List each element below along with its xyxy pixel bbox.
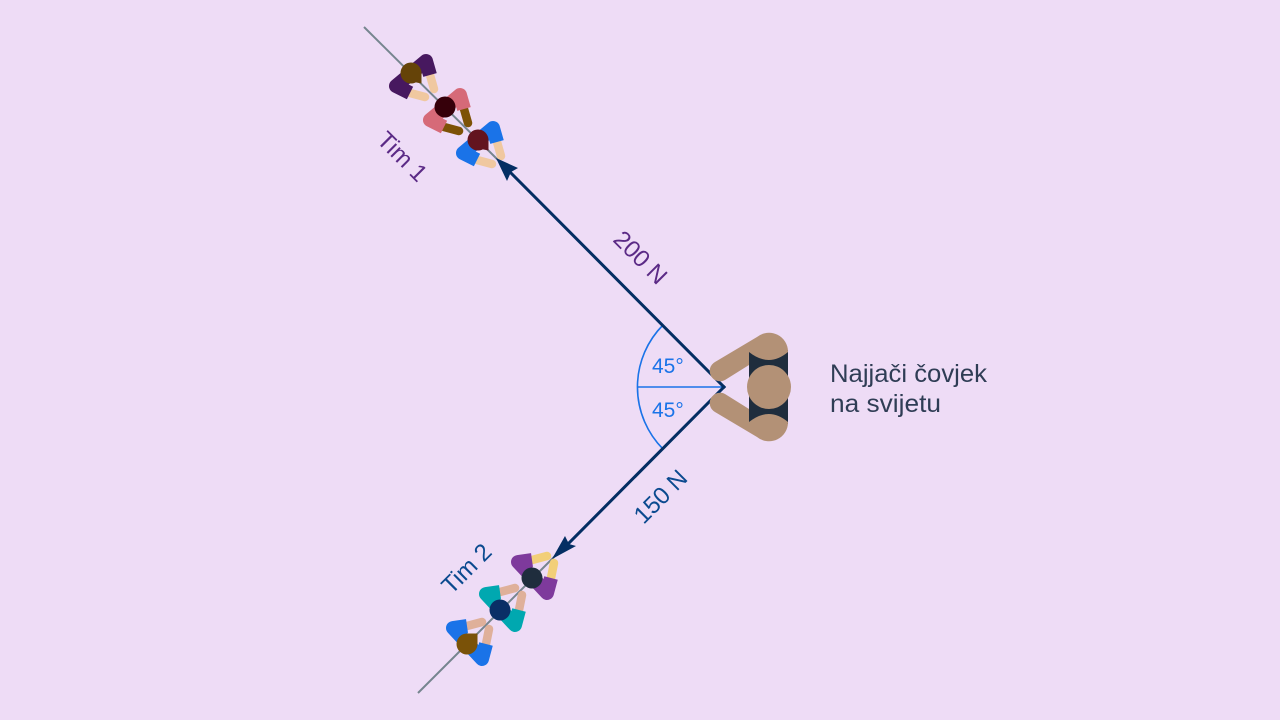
arm: upper xyxy=(710,333,788,381)
label: team 1: Tim 1 xyxy=(372,127,432,187)
person: team 1 middle xyxy=(430,95,468,131)
arm: lower xyxy=(710,393,788,441)
label: strongest man: na svijetu xyxy=(830,390,941,418)
angle label: upper: 45° xyxy=(652,355,684,378)
person: team 1 rear xyxy=(396,61,434,97)
person: team 1 front xyxy=(463,128,501,164)
angle markers xyxy=(637,325,725,449)
rope: team 2 xyxy=(418,555,556,693)
rope: team 1 xyxy=(364,27,500,162)
body xyxy=(749,350,788,424)
angle label: lower: 45° xyxy=(652,399,684,422)
label: strongest man xyxy=(830,360,988,418)
person: team 2 front xyxy=(518,556,554,593)
force arrows xyxy=(496,158,724,559)
person: team 2 middle xyxy=(486,588,522,625)
arrow: 150 N xyxy=(552,387,724,559)
label: 150 N: 150 N xyxy=(629,465,693,529)
person: team 2 rear xyxy=(453,622,489,659)
label: team 2: Tim 2 xyxy=(437,539,497,599)
team 2 xyxy=(453,556,554,659)
label: strongest man: Najjači čovjek xyxy=(830,360,988,388)
team 1 xyxy=(396,61,501,164)
strongest man xyxy=(710,333,791,441)
label: 200 N: 200 N xyxy=(608,226,672,290)
head xyxy=(747,365,791,409)
arrow: 200 N xyxy=(496,158,724,387)
